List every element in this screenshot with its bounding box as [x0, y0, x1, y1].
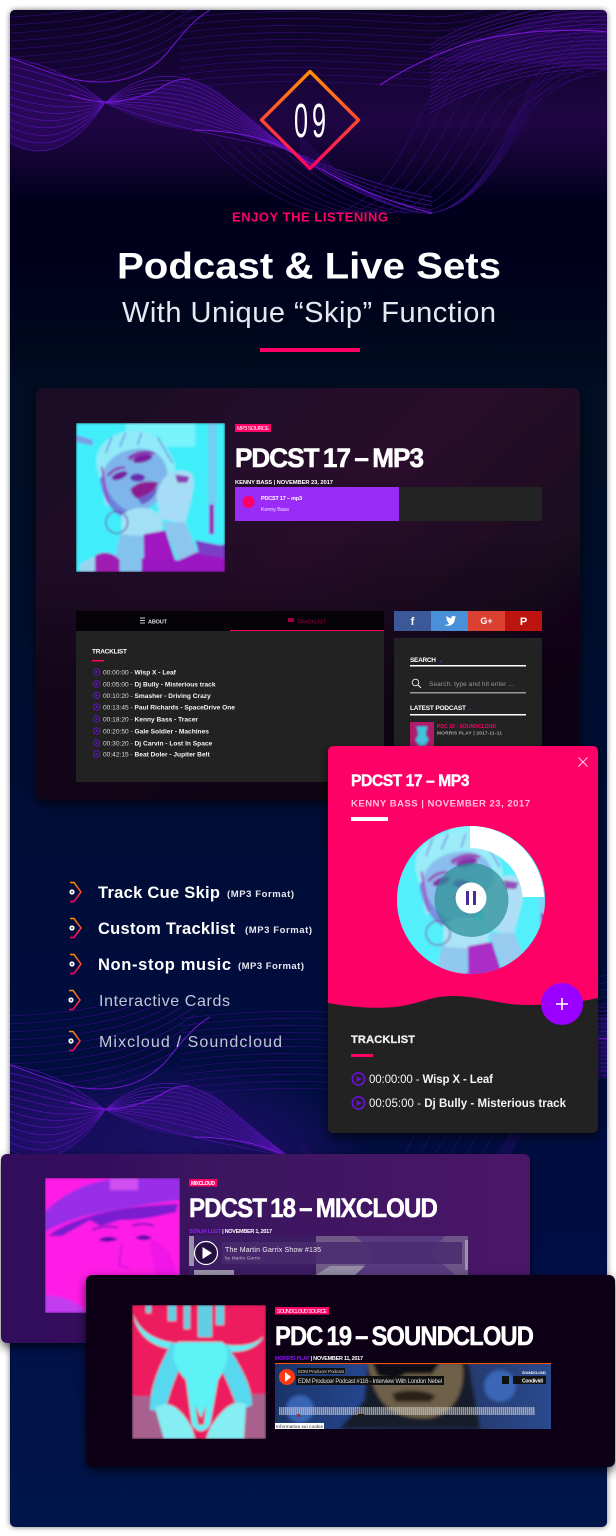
feature: non-stop music: Non-stop music: [98, 956, 231, 974]
panel: SoundCloud podcast: [86, 1275, 615, 1467]
panel: mobile player card: [328, 746, 598, 1133]
Mixcloud embed: The Martin Garrix Show #135: [225, 1247, 321, 1254]
tracklist panel: 00:05:00 - Dj Bully - Misterious track: [103, 682, 216, 688]
badge: Mixcloud: MIXCLOUD: [191, 1181, 215, 1187]
sidebar panel: SEARCH: [410, 657, 436, 664]
feature: track cue skip: (MP3 Format): [227, 889, 294, 900]
badge: SoundCloud source: [275, 1307, 329, 1315]
album disc with progress arc: [397, 826, 545, 974]
author and date: KENNY BASS | NOVEMBER 23, 2017: [235, 480, 333, 486]
icon: section number diamond: [262, 72, 358, 168]
tabs: [76, 611, 384, 631]
author and date: MORRIS PLAY | NOVEMBER 11, 2017: [275, 1356, 363, 1362]
feature: non-stop music: [69, 954, 304, 974]
card underline: [351, 817, 388, 821]
heading: PDCST 18: PDCST 18 – MIXCLOUD: [189, 1193, 437, 1223]
SoundCloud embed: SOUNDCLOUD: [522, 1371, 546, 1375]
badge: SoundCloud source: SOUNDCLOUD SOURCE: [277, 1309, 328, 1315]
social share buttons: P: [520, 616, 527, 628]
social share buttons: G+: [480, 616, 493, 626]
decorative purple wave lines: [10, 0, 616, 1223]
badge: MP3 source: [235, 424, 271, 432]
SoundCloud embed: Condividi: [522, 1378, 544, 1384]
cover photo: woman: [76, 423, 225, 572]
icon: section number diamond: 9: [312, 95, 326, 148]
title underline: [260, 348, 360, 352]
icon: section number diamond: 0: [294, 95, 308, 148]
audio player: Kenny Bass: [261, 507, 289, 513]
card tracklist: 00:00:00 - Wisp X - Leaf: [369, 1074, 493, 1086]
social share buttons: f: [411, 616, 415, 628]
feature: interactive cards: Interactive Cards: [99, 993, 230, 1010]
card title: PDCST 17 – MP3: [351, 772, 469, 790]
badge: Mixcloud: [189, 1179, 217, 1187]
tracklist panel: 00:18:20 - Kenny Bass - Tracer: [103, 716, 198, 724]
title: Podcast & Live Sets: [117, 246, 501, 286]
tabs: TRACKLIST: [297, 620, 327, 626]
tracklist panel: 00:13:45 - Paul Richards - SpaceDrive One: [103, 704, 235, 712]
tracklist panel: 00:00:00 - Wisp X - Leaf: [103, 670, 177, 676]
panel: MP3 podcast page: [36, 388, 580, 800]
sidebar panel: [394, 638, 542, 782]
card tracklist: TRACKLIST: [351, 1034, 415, 1046]
eyebrow: ENJOY THE LISTENING: [232, 210, 388, 224]
heading: PDCST 17 - MP3: PDCST 17 – MP3: [235, 443, 424, 473]
feature: non-stop music: (MP3 Format): [238, 961, 304, 972]
feature: custom tracklist: [69, 918, 312, 938]
SoundCloud embed: EDM Producer Podcast #116 - Interview With London Nebel: [298, 1379, 442, 1385]
sidebar panel: LATEST PODCAST: [410, 705, 466, 712]
badge: MP3 source: MP3 SOURCE: [237, 426, 269, 432]
Mixcloud embed: by Martin Garrix: [225, 1256, 261, 1262]
add button: [541, 983, 583, 1025]
SoundCloud embed: EDM Producer Podcast: [298, 1369, 345, 1375]
feature: custom tracklist: (MP3 Format): [245, 925, 312, 936]
social share buttons: [394, 611, 542, 631]
cover photo: skull: [132, 1305, 266, 1439]
heading: PDC 19: PDC 19 – SOUNDCLOUD: [275, 1321, 533, 1351]
tabs: ABOUT: [148, 620, 168, 626]
card tracklist: 00:05:00 - Dj Bully - Misterious track: [369, 1098, 567, 1110]
audio player: PDCST 17 – mp3: [261, 496, 302, 502]
feature: track cue skip: Track Cue Skip: [98, 884, 220, 902]
tracklist panel: 00:20:50 - Gale Soldier - Machines: [103, 728, 209, 736]
author and date: SONJA LUST | NOVEMBER 1, 2017: [189, 1229, 272, 1235]
sidebar panel: MORRIS PLAY | 2017-11-11: [437, 730, 502, 736]
Mixcloud embed: [189, 1236, 468, 1275]
sidebar panel: Search: type and hit enter ...: [429, 681, 514, 688]
feature: mixcloud soundcloud: Mixcloud / Soundcloud: [99, 1034, 282, 1051]
tracklist panel: [76, 631, 384, 782]
tracklist panel: 00:30:20 - Dj Carvin - Lost In Space: [103, 740, 213, 748]
panel: feature list: [68, 882, 312, 1051]
feature: custom tracklist: Custom Tracklist: [98, 920, 236, 938]
tracklist panel: 00:42:15 - Beat Doler - Jupiter Belt: [103, 752, 210, 758]
tracklist panel: 00:10:20 - Smasher - Driving Crazy: [103, 693, 211, 700]
SoundCloud embed: [275, 1363, 551, 1429]
subtitle: With Unique “Skip” Function: [122, 297, 496, 329]
SoundCloud embed: Informativa sui cookie: [276, 1424, 323, 1429]
panel: Mixcloud podcast: [1, 1154, 530, 1343]
feature: track cue skip: [69, 882, 294, 902]
cover photo: man in cap: [45, 1178, 180, 1313]
tracklist panel: TRACKLIST: [92, 648, 127, 656]
sidebar panel: PDC 19 - SOUNDCLOUD: [437, 724, 496, 730]
audio player: [235, 487, 542, 521]
icon: close: [578, 758, 588, 766]
card tracklist: [351, 1034, 567, 1110]
card meta: KENNY BASS | NOVEMBER 23, 2017: [351, 798, 530, 810]
